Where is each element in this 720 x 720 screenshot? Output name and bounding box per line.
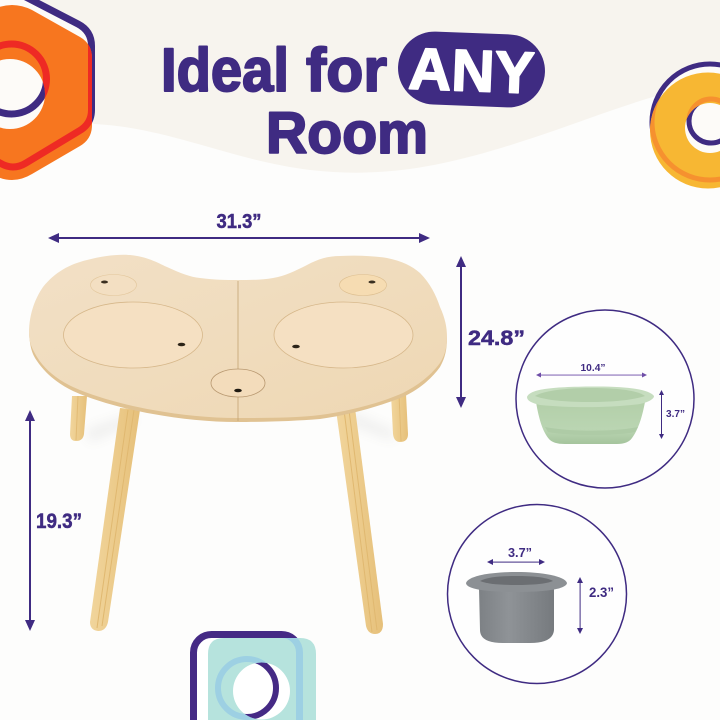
arrow: bowl height — [659, 390, 664, 439]
label: table height: 19.3” — [36, 510, 82, 533]
table top surface — [29, 255, 447, 418]
tray lid: centre — [211, 369, 265, 397]
table leg: back left — [70, 396, 87, 441]
arrow: cup width — [487, 559, 545, 565]
icon: yellow ring — [650, 64, 720, 188]
label: cup width: 3.7” — [508, 545, 532, 560]
label: bowl width: 10.4” — [580, 363, 606, 374]
arrow: table height — [25, 410, 35, 631]
label: bowl height: 3.7” — [666, 409, 685, 420]
title badge: ANY: ANY — [407, 36, 536, 106]
label: table width: 31.3” — [216, 211, 262, 233]
arrow: bowl width — [536, 372, 647, 378]
arrow: cup height — [577, 577, 583, 634]
table shadows — [86, 412, 396, 442]
icon: orange hexagon — [0, 0, 92, 180]
tray lid: left large — [64, 302, 202, 368]
table leg: front left — [90, 408, 140, 631]
table top edge — [29, 333, 447, 422]
title: for — [306, 36, 387, 104]
table leg: front right — [336, 408, 383, 634]
tray lid: right large — [274, 302, 413, 368]
label: cup height: 2.3” — [589, 584, 614, 600]
table — [29, 255, 447, 634]
green bowl — [527, 386, 654, 444]
background wave — [0, 0, 720, 173]
label: table depth: 24.8” — [468, 327, 525, 350]
tray lid: right small — [340, 274, 386, 296]
arrow: table width — [48, 233, 430, 243]
table centre seam — [237, 281, 239, 421]
panel: cup dimensions — [448, 504, 626, 684]
title: Ideal — [161, 36, 289, 104]
table leg: back right — [391, 394, 408, 442]
title: Room — [266, 101, 428, 166]
tray lid: left small — [90, 274, 136, 296]
panel: bowl dimensions — [516, 310, 694, 488]
grey cup — [466, 572, 567, 643]
title — [161, 30, 546, 166]
icon: teal square — [194, 634, 316, 720]
arrow: table depth — [456, 256, 466, 408]
